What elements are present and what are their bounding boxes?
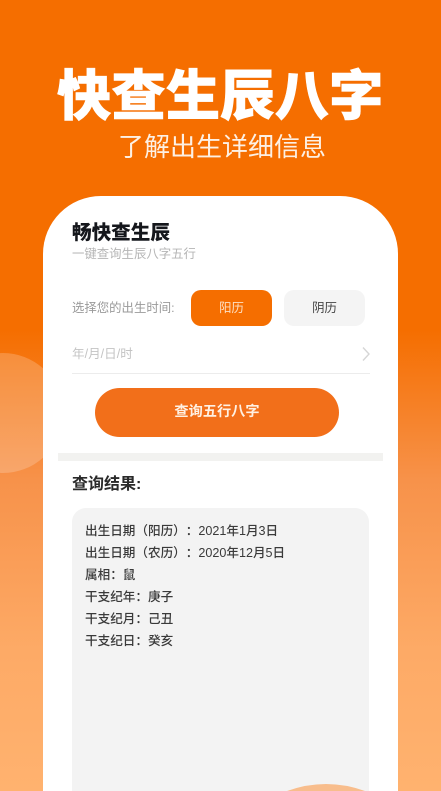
result row: lunar birth date: 出生日期（农历）：2020年12月5日 [85,546,285,560]
results panel [72,508,369,791]
button: query [95,388,339,437]
card subheading: 一键查询生辰八字五行 [72,247,196,261]
button: solar calendar [191,290,272,326]
results heading: 查询结果: [72,476,141,493]
subtitle: 了解出生详细信息 [118,132,326,162]
decorative circle: left [0,353,43,473]
result row: solar birth date: 出生日期（阳历）：2021年1月3日 [85,524,278,538]
date placeholder: 年/月/日/时 [72,347,133,361]
button: lunar calendar [284,290,365,326]
button: query: 查询五行八字 [174,404,260,420]
card heading: 畅快查生辰 [72,222,170,244]
date input underline [72,373,370,374]
result row: zodiac: 属相：鼠 [85,568,135,582]
birth time label: 选择您的出生时间: [72,301,175,315]
result row: month stem-branch: 干支纪月：己丑 [85,612,173,626]
phone card panel [43,196,398,791]
result row: day stem-branch: 干支纪日：癸亥 [85,634,173,648]
button: solar calendar: 阳历 [219,301,244,315]
decorative circle: bottom [287,784,365,791]
result row: year stem-branch: 干支纪年：庚子 [85,590,173,604]
title: 快查生辰八字 [57,66,383,127]
section divider [58,453,383,461]
button: lunar calendar: 阴历 [312,301,337,315]
icon: chevron arrow [362,347,370,361]
